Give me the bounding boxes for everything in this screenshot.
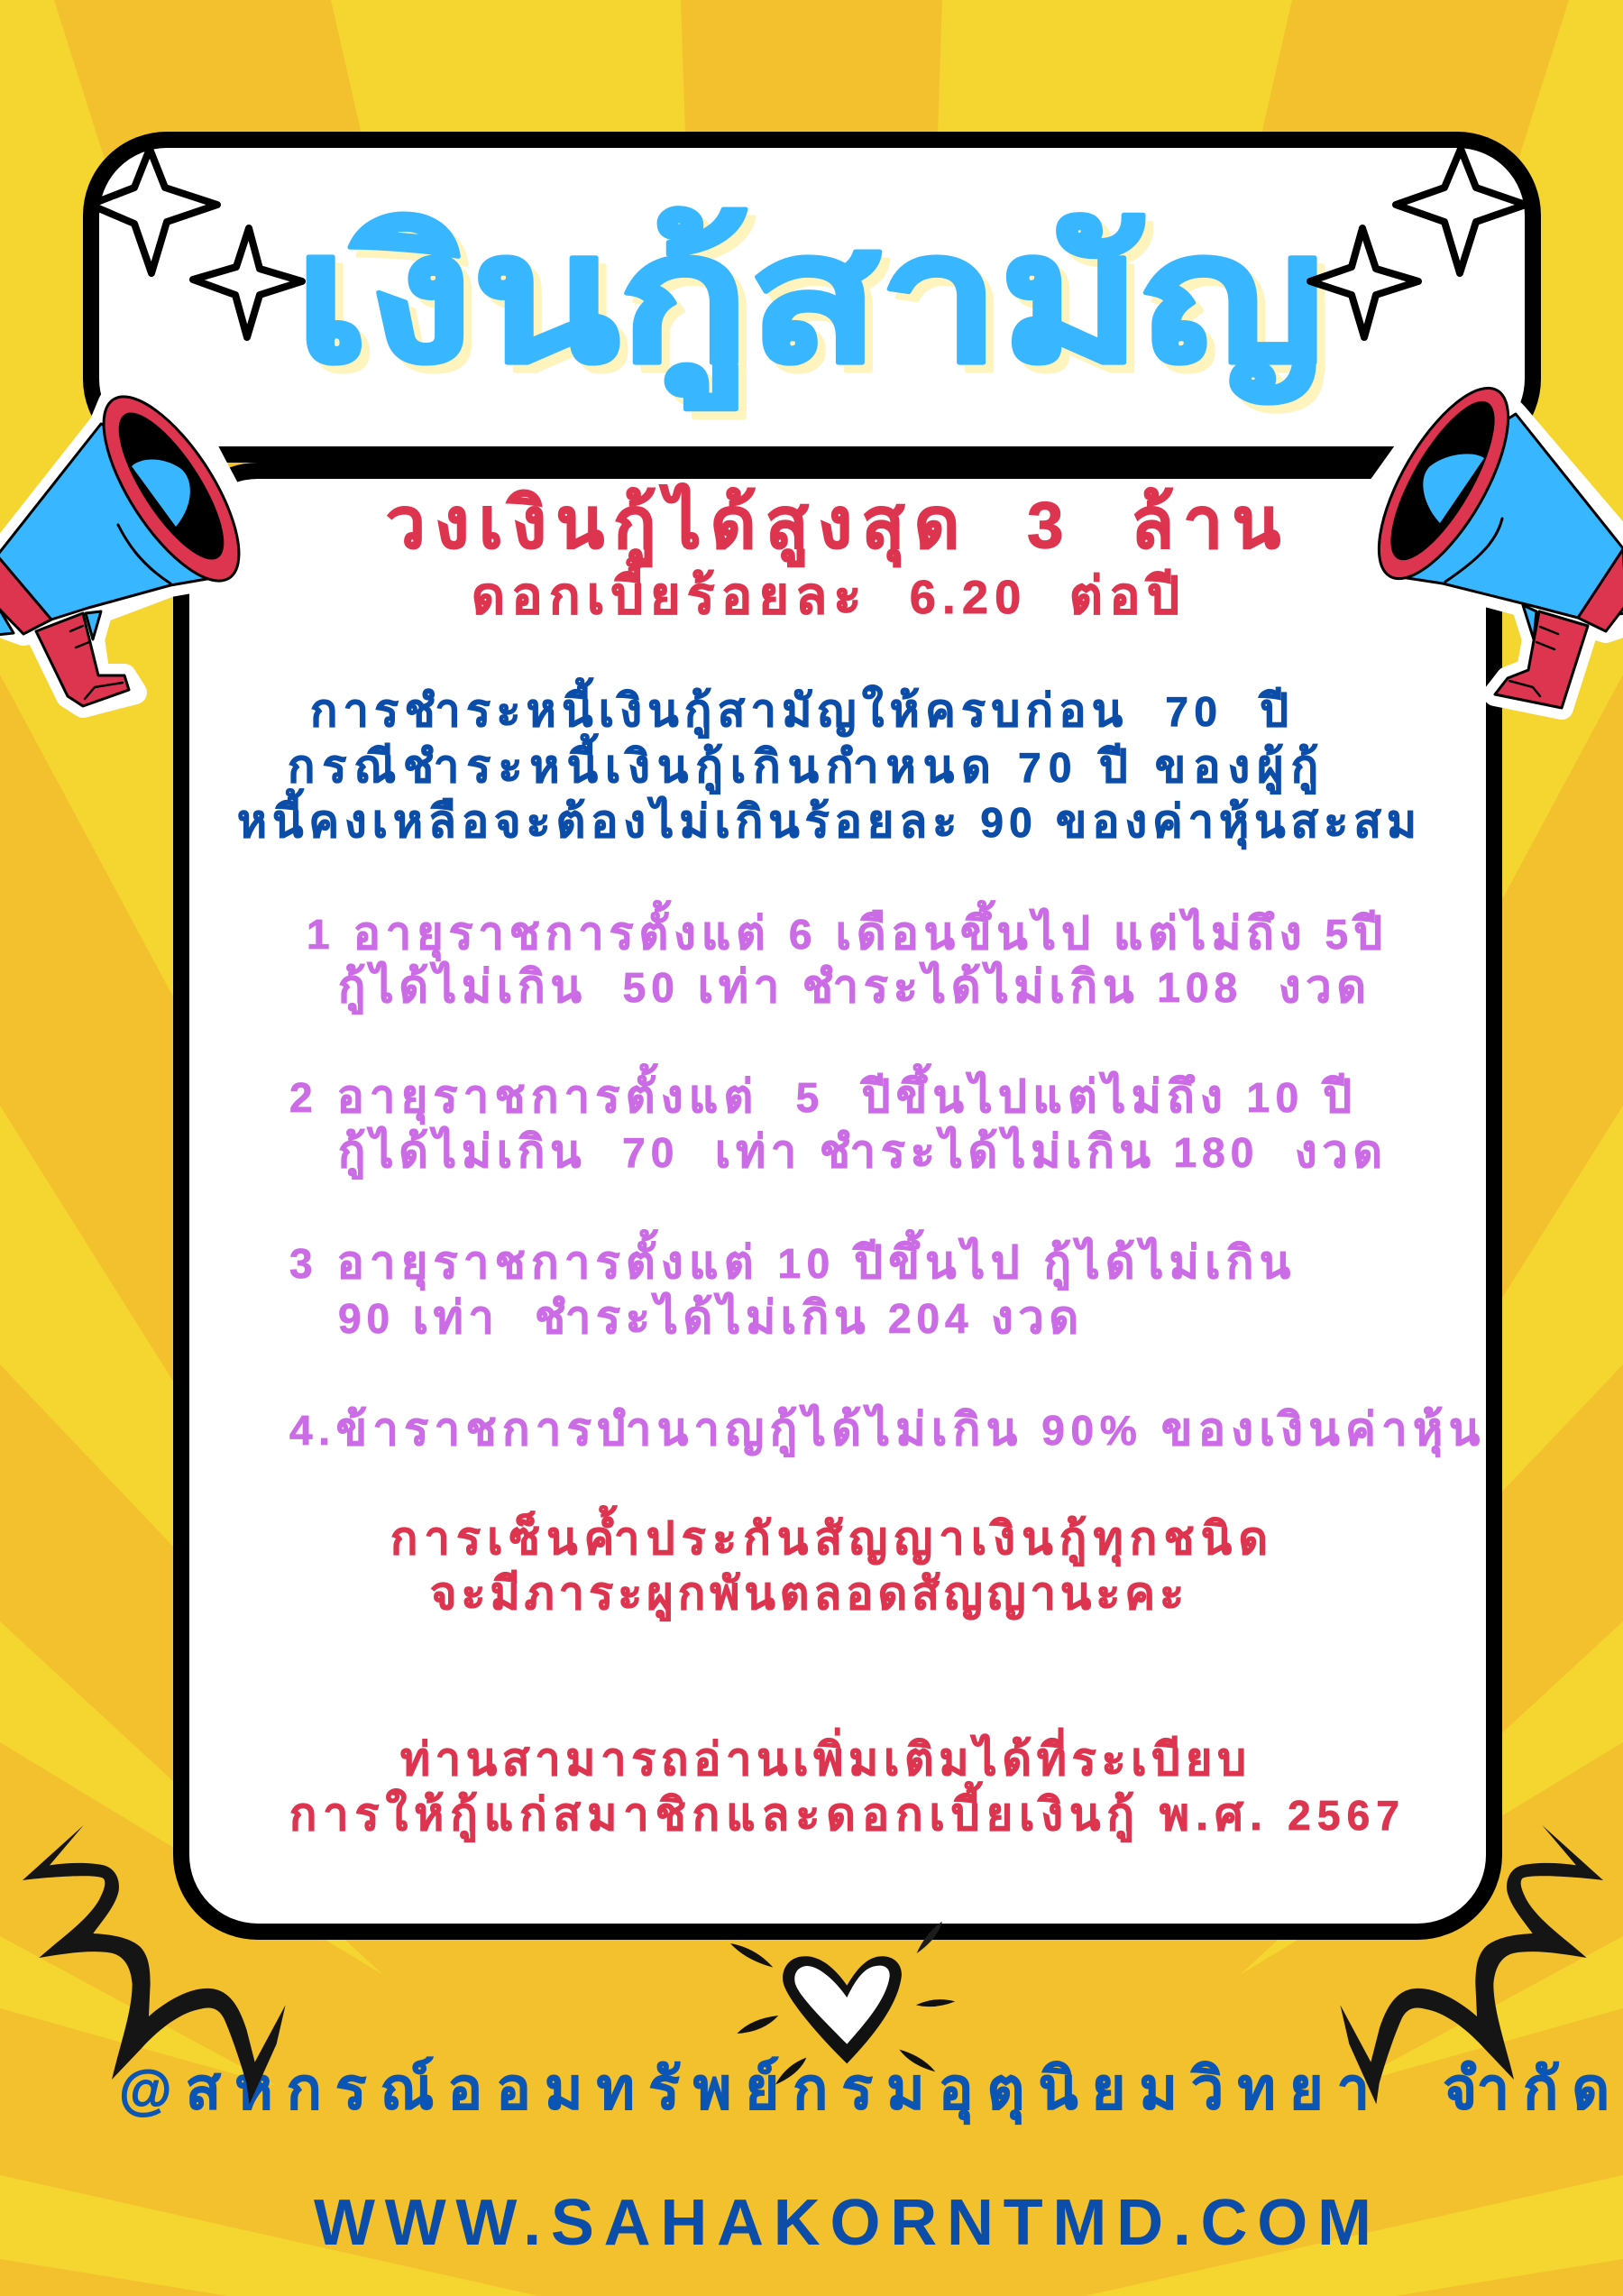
text block: tier 1 bbox=[307, 900, 1382, 1015]
text block: repayment age rule bbox=[237, 677, 1417, 850]
panel: title banner bbox=[91, 140, 1533, 455]
panel: main content bbox=[181, 471, 1494, 1932]
text block: tier 3 bbox=[289, 1229, 1290, 1343]
text block: guarantor note: การเซ็นค้ำประกันสัญญาเงินกู้ทุกชนิด bbox=[390, 1505, 1268, 1566]
text block: tier 2: 2 อายุราชการตั้งแต่ 5 ปีขึ้นไปแต่ไม่ถึง 10 ปี bbox=[289, 1063, 1352, 1125]
icon: burst left bbox=[23, 1825, 286, 2104]
text block: tier 2: กู้ได้ไม่เกิน 70 เท่า ชำระได้ไม่เกิน 180 งวด bbox=[338, 1125, 1382, 1180]
text block: repayment age rule: หนี้คงเหลือจะต้องไม่เกินร้อยละ 90 ของค่าหุ้นสะสม bbox=[237, 788, 1417, 850]
icon: sparkle top right small bbox=[1310, 228, 1418, 337]
text block: further reading: ท่านสามารถอ่านเพิ่มเติมได้ที่ระเบียบ bbox=[400, 1728, 1246, 1785]
icon: sparkle top left small bbox=[193, 228, 302, 337]
text block: tier 3: 3 อายุราชการตั้งแต่ 10 ปีขึ้นไป กู้ได้ไม่เกิน bbox=[289, 1229, 1290, 1290]
text block: further reading: การให้กู้แก่สมาชิกและดอกเบี้ยเงินกู้ พ.ศ. 2567 bbox=[289, 1781, 1399, 1842]
title: เงินกู้สามัญ bbox=[303, 207, 1332, 418]
icon: heart with rays bbox=[730, 1922, 955, 2085]
text block: tier 4: 4.ข้าราชการบำนาญกู้ได้ไม่เกิน 90% ของเงินค่าหุ้น bbox=[289, 1403, 1480, 1457]
icon: burst right bbox=[1340, 1825, 1603, 2104]
title: เงินกู้สามัญ bbox=[295, 198, 1324, 409]
text block: tier 3: 90 เท่า ชำระได้ไม่เกิน 204 งวด bbox=[338, 1291, 1078, 1343]
heading: interest rate: ดอกเบี้ยร้อยละ 6.20 ต่อปี bbox=[472, 558, 1179, 625]
icon: sparkle top right large bbox=[1396, 149, 1526, 273]
text block: further reading bbox=[289, 1728, 1399, 1842]
text block: repayment age rule: การชำระหนี้เงินกู้สามัญให้ครบก่อน 70 ปี bbox=[310, 677, 1288, 739]
footer: website: WWW.SAHAKORNTMD.COM bbox=[314, 2187, 1371, 2259]
icon: sparkle top left large bbox=[90, 149, 217, 273]
text block: repayment age rule: กรณีชำระหนี้เงินกู้เกินกำหนด 70 ปี ของผู้กู้ bbox=[288, 733, 1318, 794]
heading: loan limit: วงเงินกู้ได้สูงสุด 3 ล้าน bbox=[386, 482, 1280, 567]
text block: tier 1: 1 อายุราชการตั้งแต่ 6 เดือนขึ้นไป แต่ไม่ถึง 5ปี bbox=[307, 900, 1382, 961]
icon: megaphone right bbox=[1354, 370, 1623, 708]
text block: tier 1: กู้ได้ไม่เกิน 50 เท่า ชำระได้ไม่เกิน 108 งวด bbox=[338, 960, 1366, 1015]
footer: organisation name: @สหกรณ์ออมทรัพย์กรมอุตุนิยมวิทยา จำกัด bbox=[119, 2056, 1609, 2125]
text block: guarantor note bbox=[390, 1505, 1268, 1621]
text block: tier 2 bbox=[289, 1063, 1382, 1180]
icon: megaphone left bbox=[0, 377, 264, 706]
text block: guarantor note: จะมีภาระผูกพันตลอดสัญญานะคะ bbox=[430, 1568, 1184, 1621]
